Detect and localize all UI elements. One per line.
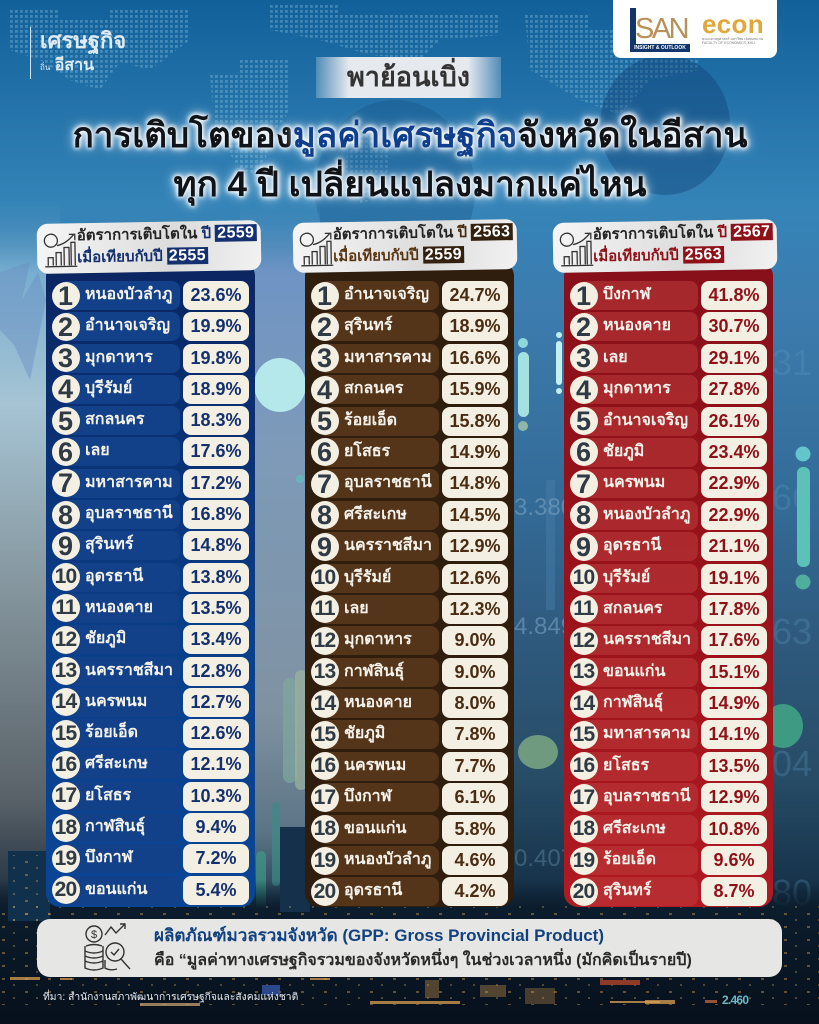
panel: ranking 2559: 9.4% xyxy=(195,817,237,837)
panel: ranking 2567: 9.6% xyxy=(713,850,755,870)
panel: ranking 2563: 19 xyxy=(314,849,335,872)
panel: ranking 2559: 15 xyxy=(55,722,76,745)
panel: 2563 vs 2559 header: เมื่อเทียบกับปี xyxy=(333,247,419,265)
panel: ranking 2563: 13 xyxy=(314,660,335,683)
panel: ranking 2567: 6 xyxy=(576,437,591,467)
panel: ranking 2563: 16 xyxy=(314,754,335,777)
panel: ranking 2567: บุรีรัมย์ xyxy=(603,569,650,586)
panel: ranking 2567: 21.1% xyxy=(708,536,760,556)
panel: ranking 2559: หนองคาย xyxy=(85,599,153,616)
panel: ranking 2563: 14.5% xyxy=(449,505,501,525)
panel: ranking 2559: ขอนแก่น xyxy=(85,881,147,898)
panel: ranking 2559: 17.6% xyxy=(190,441,242,461)
background: 4.849 xyxy=(514,613,574,640)
logo: ISAN xyxy=(630,8,690,52)
panel: ranking 2567: 13.5% xyxy=(708,756,760,776)
panel: ranking 2567: หนองบัวลำภู xyxy=(603,506,690,523)
kicker xyxy=(316,57,501,98)
panel: ranking 2559: 12.6% xyxy=(190,723,242,743)
panel: ranking 2567: 14 xyxy=(573,692,594,715)
panel: ranking 2563: 24.7% xyxy=(449,285,501,305)
panel: ranking 2563: ร้อยเอ็ด xyxy=(344,412,397,429)
panel: ranking 2559: 17.2% xyxy=(190,473,242,493)
panel: ranking 2563: มุกดาหาร xyxy=(344,631,412,648)
panel: ranking 2563: 3 xyxy=(317,343,332,373)
panel: ranking 2563: เลย xyxy=(344,600,369,617)
panel: ranking 2563: สกลนคร xyxy=(344,380,404,397)
panel: ranking 2567: 17.6% xyxy=(708,630,760,650)
panel: ranking 2563: บึงกาฬ xyxy=(344,788,392,805)
panel: ranking 2567: 4 xyxy=(576,375,591,405)
panel: ranking 2563: 9.0% xyxy=(454,662,496,682)
panel: ranking 2559 xyxy=(46,262,255,907)
panel: ranking 2563: 14.8% xyxy=(449,473,501,493)
panel: ranking 2567: ชัยภูมิ xyxy=(603,443,644,460)
icon: coins and magnifier: $ xyxy=(91,929,97,941)
ghost figures on the right: 66 xyxy=(772,477,812,518)
ghost figures on the right: 31 xyxy=(772,342,812,383)
panel: ranking 2563: ยโสธร xyxy=(344,443,390,460)
panel: ranking 2563: อำนาจเจริญ xyxy=(344,286,429,303)
panel: 2567 vs 2563 header: อัตราการเติบโตใน ปี xyxy=(593,224,727,243)
panel: ranking 2567: บึงกาฬ xyxy=(603,286,651,303)
panel: ranking 2559: 20 xyxy=(55,878,76,901)
panel: ranking 2563: หนองบัวลำภู xyxy=(344,851,431,868)
panel: ranking 2567: 26.1% xyxy=(708,411,760,431)
panel: ranking 2563: 15.9% xyxy=(449,379,501,399)
panel: 2567 vs 2563 header xyxy=(553,219,777,273)
brand: เศรษฐกิจถิ่นอีสาน xyxy=(30,27,135,79)
panel: ranking 2559: 9 xyxy=(58,531,73,561)
panel: ranking 2563: ขอนแก่น xyxy=(344,820,406,837)
panel: ranking 2567: 10 xyxy=(573,566,594,589)
panel: ranking 2559: สกลนคร xyxy=(85,411,144,428)
panel: ranking 2563: นครพนม xyxy=(344,757,406,774)
panel: ranking 2559: กาฬสินธุ์ xyxy=(85,818,145,835)
title: การเติบโตของมูลค่าเศรษฐกิจจังหวัดในอีสาน xyxy=(73,116,747,155)
panel: ranking 2563: กาฬสินธุ์ xyxy=(344,663,404,680)
panel: ranking 2559: มหาสารคาม xyxy=(85,474,173,491)
panel: ranking 2563: 4.6% xyxy=(454,850,496,870)
panel: ranking 2563: 4 xyxy=(317,375,332,405)
panel: ranking 2567: 12.9% xyxy=(708,787,760,807)
panel: ranking 2559: 13 xyxy=(55,659,76,682)
panel: ranking 2559: 8 xyxy=(58,500,73,530)
panel: ranking 2563: 7.8% xyxy=(454,724,496,744)
panel: ranking 2563: 15 xyxy=(314,723,335,746)
panel: ranking 2559: มุกดาหาร xyxy=(85,349,153,366)
panel: ranking 2563 xyxy=(305,262,514,907)
panel: ranking 2567: 19.1% xyxy=(708,568,760,588)
panel: 2563 vs 2559 header: 2563 xyxy=(473,223,511,241)
city at the bottom xyxy=(0,880,819,1024)
panel: ranking 2563: 14 xyxy=(314,692,335,715)
callout text: คือ “มูลค่าทางเศรษฐกิจรวมของจังหวัดหนึ่งๆ ในช่วงเวลาหนึ่ง (มักคิดเป็นรายปี) xyxy=(154,952,692,969)
logo: ISAN: SAN xyxy=(635,13,687,45)
title xyxy=(66,106,756,212)
panel: ranking 2563: 5.8% xyxy=(454,819,496,839)
panel: ranking 2559: 19.8% xyxy=(190,348,242,368)
logo card xyxy=(613,0,777,58)
panel: ranking 2567: 16 xyxy=(573,754,594,777)
panel: ranking 2563: 17 xyxy=(314,786,335,809)
panel: ranking 2563: 2 xyxy=(317,312,332,342)
panel: ranking 2567: 27.8% xyxy=(708,379,760,399)
panel: ranking 2559: 18.3% xyxy=(190,410,242,430)
panel: ranking 2559: 13.8% xyxy=(190,567,242,587)
panel: ranking 2567: 15.1% xyxy=(708,662,760,682)
panel: ranking 2567: 22.9% xyxy=(708,505,760,525)
panel: ranking 2567: 8 xyxy=(576,500,591,530)
panel: ranking 2567: 2 xyxy=(576,312,591,342)
panel: ranking 2567: 5 xyxy=(576,406,591,436)
panel: ranking 2567: ศรีสะเกษ xyxy=(603,820,666,837)
panel: ranking 2559: นครราชสีมา xyxy=(85,662,173,679)
panel: 2559 vs 2555 header: 2555 xyxy=(169,247,206,265)
background: 2.460 xyxy=(722,993,749,1007)
panel: 2567 vs 2563 header: เมื่อเทียบกับปี xyxy=(593,247,679,265)
title: ทุก 4 ปี เปลี่ยนแปลงมากแค่ไหน xyxy=(174,165,646,204)
panel: ranking 2559: 19 xyxy=(55,847,76,870)
kicker: พาย้อนเบิ่ง xyxy=(347,62,470,92)
logo: ISAN: INSIGHT & OUTLOOK xyxy=(634,45,686,51)
panel: ranking 2563: 9.0% xyxy=(454,630,496,650)
logo: econ: FACULTY OF ECONOMICS, KKU xyxy=(702,41,755,45)
panel: ranking 2559: ศรีสะเกษ xyxy=(85,755,148,772)
panel: ranking 2567: 7 xyxy=(576,469,591,499)
panel: ranking 2563: 14.9% xyxy=(449,442,501,462)
panel: ranking 2559: 16.8% xyxy=(190,504,242,524)
panel: ranking 2563: 6.1% xyxy=(454,787,496,807)
brand: เศรษฐกิจถิ่นอีสาน: ถิ่น อีสาน xyxy=(40,57,94,74)
panel: ranking 2559: 7 xyxy=(58,468,73,498)
panel: ranking 2567: อำนาจเจริญ xyxy=(603,412,688,429)
panel: ranking 2559: 12 xyxy=(55,628,76,651)
panel: ranking 2567: ยโสธร xyxy=(603,757,649,774)
panel: ranking 2563: 11 xyxy=(314,597,335,620)
panel: ranking 2563: 12 xyxy=(314,629,335,652)
panel: ranking 2559: 7.2% xyxy=(195,848,237,868)
panel: ranking 2567: 17.8% xyxy=(708,599,760,619)
panel: ranking 2567: อุดรธานี xyxy=(603,537,661,554)
background: 0.407 xyxy=(514,845,574,872)
panel: ranking 2567: 19 xyxy=(573,849,594,872)
panel: ranking 2567: 41.8% xyxy=(708,285,760,305)
panel: ranking 2563: 12.3% xyxy=(449,599,501,619)
panel: ranking 2567: สุรินทร์ xyxy=(603,882,651,899)
panel: ranking 2567: 10.8% xyxy=(708,819,760,839)
panel: ranking 2567: ร้อยเอ็ด xyxy=(603,851,656,868)
panel: ranking 2563: 12.6% xyxy=(449,568,501,588)
panel: ranking 2559: อำนาจเจริญ xyxy=(85,317,170,334)
panel: ranking 2559: 3 xyxy=(58,343,73,373)
panel: ranking 2563: 5 xyxy=(317,406,332,436)
panel: ranking 2559: 13.4% xyxy=(190,629,242,649)
panel: ranking 2567: 11 xyxy=(573,597,594,620)
panel: ranking 2559: 18.9% xyxy=(190,379,242,399)
panel: ranking 2563: 20 xyxy=(314,880,335,903)
panel: ranking 2563: 7 xyxy=(317,469,332,499)
brand: เศรษฐกิจถิ่นอีสาน: เศรษฐกิจ xyxy=(40,28,126,53)
panel: ranking 2559: 5 xyxy=(58,406,73,436)
panel: ranking 2559: 2 xyxy=(58,312,73,342)
panel: ranking 2563: มหาสารคาม xyxy=(344,349,432,366)
panel: ranking 2559: 10.3% xyxy=(190,786,242,806)
panel: ranking 2563: 9 xyxy=(317,532,332,562)
panel: ranking 2563: 7.7% xyxy=(454,756,496,776)
panel: ranking 2567: 23.4% xyxy=(708,442,760,462)
panel: ranking 2567: 15 xyxy=(573,723,594,746)
callout heading: ผลิตภัณฑ์มวลรวมจังหวัด (GPP: Gross Provincial Product) xyxy=(154,926,604,945)
panel: ranking 2559: 1 xyxy=(58,280,73,310)
panel: ranking 2559: 4 xyxy=(58,374,73,404)
icon: coins and magnifier xyxy=(84,923,130,971)
panel: ranking 2567: 30.7% xyxy=(708,316,760,336)
panel: ranking 2559: 17 xyxy=(55,784,76,807)
panel: ranking 2563: หนองคาย xyxy=(344,694,412,711)
haze in left gutters xyxy=(0,200,60,930)
panel: ranking 2559: 23.6% xyxy=(190,285,242,305)
panel: 2559 vs 2555 header: 2559 xyxy=(217,224,255,242)
panel: ranking 2559: ร้อยเอ็ด xyxy=(85,724,138,741)
panel: ranking 2559: 14 xyxy=(55,690,76,713)
panel: ranking 2563: 16.6% xyxy=(449,348,501,368)
panel: ranking 2559: 12.7% xyxy=(190,692,242,712)
panel: ranking 2567: 14.1% xyxy=(708,724,760,744)
panel: ranking 2559: 6 xyxy=(58,437,73,467)
ghost figures on the right: 63 xyxy=(772,611,812,652)
panel: ranking 2567: 9 xyxy=(576,532,591,562)
panel: ranking 2563: 18.9% xyxy=(449,316,501,336)
ghost figures on the right: 04 xyxy=(772,743,812,784)
panel: ranking 2559: 11 xyxy=(55,596,76,619)
panel: ranking 2567 xyxy=(564,262,773,907)
panel: ranking 2567: อุบลราชธานี xyxy=(603,788,691,805)
panel: ranking 2559: 10 xyxy=(55,565,76,588)
panel: ranking 2567: มุกดาหาร xyxy=(603,380,671,397)
panel: ranking 2559: หนองบัวลำภู xyxy=(85,286,172,303)
panel: ranking 2567: 20 xyxy=(573,880,594,903)
panel: ranking 2559: อุบลราชธานี xyxy=(85,505,173,522)
panel: ranking 2563: สุรินทร์ xyxy=(344,317,392,334)
panel: ranking 2559: 14.8% xyxy=(190,535,242,555)
logo: econ: คณะเศรษฐศาสตร์ มหาวิทยาลัยขอนแก่น xyxy=(702,37,763,41)
panel: ranking 2567: 12 xyxy=(573,629,594,652)
panel: ranking 2559: เลย xyxy=(85,442,110,459)
panel: ranking 2563: อุดรธานี xyxy=(344,882,402,899)
panel: 2563 vs 2559 header: 2559 xyxy=(425,246,462,264)
panel: ranking 2559: นครพนม xyxy=(85,693,147,710)
panel: ranking 2559: 18 xyxy=(55,816,76,839)
panel: ranking 2567: 22.9% xyxy=(708,473,760,493)
panel: ranking 2563: 15.8% xyxy=(449,411,501,431)
panel: ranking 2559: ชัยภูมิ xyxy=(85,630,126,647)
panel: ranking 2567: กาฬสินธุ์ xyxy=(603,694,663,711)
panel: ranking 2567: หนองคาย xyxy=(603,317,671,334)
source: ที่มา: สำนักงานสภาพัฒนาการเศรษฐกิจและสังคมแห่งชาติ xyxy=(43,992,298,1003)
panel: 2563 vs 2559 header: อัตราการเติบโตใน ปี xyxy=(333,224,467,243)
panel: ranking 2563: 18 xyxy=(314,817,335,840)
panel: 2559 vs 2555 header xyxy=(37,220,261,274)
panel: 2567 vs 2563 header: 2567 xyxy=(733,223,771,241)
panel: ranking 2567: 18 xyxy=(573,817,594,840)
panel: ranking 2563: นครราชสีมา xyxy=(344,537,432,554)
panel: ranking 2563: 1 xyxy=(317,280,332,310)
panel: ranking 2563: 10 xyxy=(314,566,335,589)
panel: ranking 2559: 13.5% xyxy=(190,598,242,618)
panel: ranking 2567: สกลนคร xyxy=(603,600,662,617)
panel: ranking 2559: 16 xyxy=(55,753,76,776)
panel: ranking 2563: 8.0% xyxy=(454,693,496,713)
capsules and ghost figures in the third gutter xyxy=(518,338,528,348)
panel: ranking 2567: 3 xyxy=(576,343,591,373)
callout: GPP definition xyxy=(37,919,782,977)
panel: ranking 2567: 29.1% xyxy=(708,348,760,368)
panel: ranking 2563: 12.9% xyxy=(449,536,501,556)
panel: ranking 2563: 8 xyxy=(317,500,332,530)
panel: ranking 2559: 12.8% xyxy=(190,661,242,681)
ghost figures on the right xyxy=(772,342,812,913)
panel: ranking 2559: บึงกาฬ xyxy=(85,849,133,866)
panel: ranking 2563: 6 xyxy=(317,437,332,467)
panel: 2563 vs 2559 header xyxy=(293,219,517,273)
panel: ranking 2559: ยโสธร xyxy=(85,787,131,804)
panel: ranking 2567: มหาสารคาม xyxy=(603,725,691,742)
panel: ranking 2559: 19.9% xyxy=(190,316,242,336)
panel: ranking 2567: เลย xyxy=(603,349,628,366)
panel: ranking 2563: 4.2% xyxy=(454,881,496,901)
panel: ranking 2567: 14.9% xyxy=(708,693,760,713)
panel: ranking 2559: บุรีรัมย์ xyxy=(85,380,132,397)
panel: ranking 2559: อุดรธานี xyxy=(85,568,143,585)
panel: ranking 2567: นครราชสีมา xyxy=(603,631,691,648)
panel: ranking 2563: อุบลราชธานี xyxy=(344,474,432,491)
panel: ranking 2563: บุรีรัมย์ xyxy=(344,569,391,586)
panel: ranking 2563: ชัยภูมิ xyxy=(344,725,385,742)
panel: ranking 2567: 17 xyxy=(573,786,594,809)
background: 3.380 xyxy=(514,494,574,521)
panel: ranking 2567: 13 xyxy=(573,660,594,683)
panel: ranking 2559: สุรินทร์ xyxy=(85,536,133,553)
panel: 2559 vs 2555 header: เมื่อเทียบกับปี xyxy=(77,248,163,266)
panel: ranking 2563: ศรีสะเกษ xyxy=(344,506,407,523)
panel: 2567 vs 2563 header: 2563 xyxy=(685,246,722,264)
panel: ranking 2567: ขอนแก่น xyxy=(603,663,665,680)
panel: ranking 2559: 5.4% xyxy=(195,880,237,900)
ghost figures on the right: 80 xyxy=(772,872,812,913)
panel: ranking 2567: 8.7% xyxy=(713,881,755,901)
panel: ranking 2559: 12.1% xyxy=(190,754,242,774)
panel: ranking 2567: นครพนม xyxy=(603,474,665,491)
panel: ranking 2567: 1 xyxy=(576,280,591,310)
panel: 2559 vs 2555 header: อัตราการเติบโตใน ปี xyxy=(77,225,211,244)
